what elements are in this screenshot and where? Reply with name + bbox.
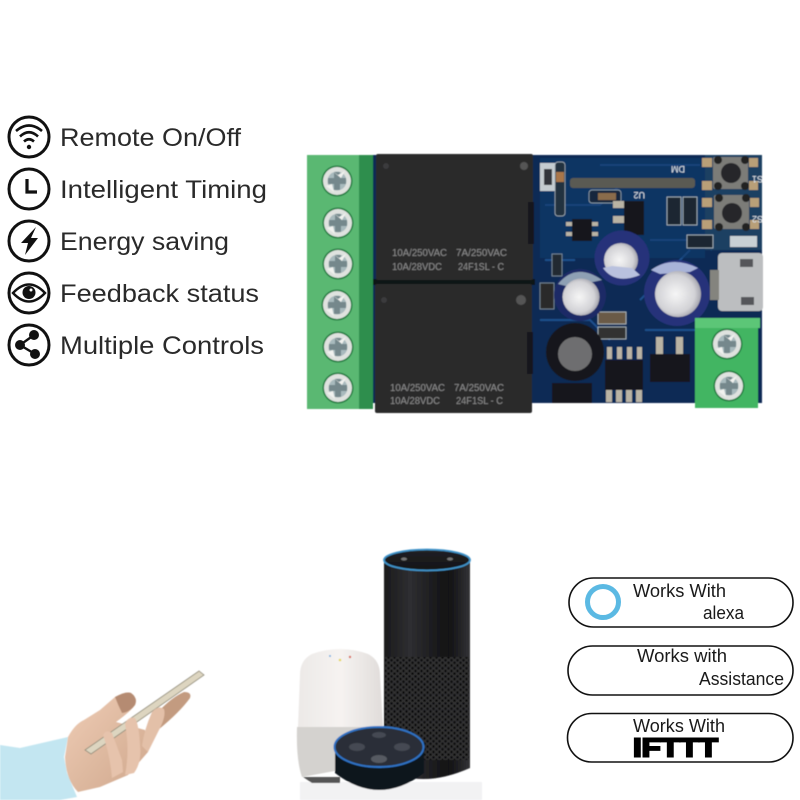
tactile button S2 xyxy=(702,194,759,231)
icon: share nodes xyxy=(9,325,49,365)
silkscreen labels xyxy=(633,164,763,224)
capacitor left xyxy=(554,269,606,321)
USB port xyxy=(710,253,763,311)
palm and thumb xyxy=(65,692,148,792)
left screw terminal xyxy=(307,155,373,409)
right screw terminal xyxy=(695,318,760,408)
circuit board xyxy=(312,155,762,403)
far finger xyxy=(158,692,190,730)
silkscreen labels: DM xyxy=(671,164,685,174)
relay 1 markings xyxy=(392,247,507,273)
label: Multiple Controls: Multiple Controls xyxy=(60,332,264,360)
relay 1 markings: 7A/250VAC xyxy=(456,247,507,259)
relay 2 markings: 10A/250VAC xyxy=(390,382,445,394)
small surface components xyxy=(540,162,757,339)
relay 2 xyxy=(375,284,533,413)
icon: eye xyxy=(9,273,49,313)
speaker mesh xyxy=(385,657,469,760)
feature list xyxy=(9,117,267,365)
solder pads xyxy=(566,201,683,402)
text: Works With: Works With xyxy=(633,580,726,601)
antenna strip xyxy=(570,178,695,188)
middle finger xyxy=(142,708,164,752)
relay 2 markings: 24F1SL - C xyxy=(456,395,503,407)
feature: Remote On/Off xyxy=(9,117,241,157)
label: Feedback status: Feedback status xyxy=(60,280,259,308)
text: alexa: alexa xyxy=(703,602,745,623)
right terminal screws xyxy=(712,328,744,402)
label: Intelligent Timing: Intelligent Timing xyxy=(60,176,267,204)
echo dot xyxy=(334,727,424,790)
text: Works With: Works With xyxy=(633,715,725,736)
feature: Feedback status xyxy=(9,273,259,313)
relay gap xyxy=(373,279,535,285)
echo top with light ring xyxy=(384,550,470,570)
badge: Works with Assistance xyxy=(568,645,793,695)
relay 1 markings: 10A/250VAC xyxy=(392,247,447,259)
thumb nail shading xyxy=(115,692,136,713)
capacitor right xyxy=(644,260,710,326)
label: Energy saving: Energy saving xyxy=(60,228,229,256)
relay 2 markings: 7A/250VAC xyxy=(454,382,504,394)
relay module board xyxy=(307,154,763,413)
hand holding phone xyxy=(0,671,204,800)
tactile button S1 xyxy=(702,156,758,190)
text: Works with: Works with xyxy=(637,645,727,666)
badge: Works With alexa xyxy=(569,578,793,627)
silkscreen labels: S2 xyxy=(752,214,763,224)
icon: alexa ring xyxy=(588,586,618,620)
icon: lightning bolt xyxy=(9,221,49,261)
badge: Works With IFTTT xyxy=(568,714,793,762)
little finger xyxy=(103,731,123,778)
relay 1 markings: 10A/28VDC xyxy=(392,261,442,273)
smart speakers xyxy=(297,550,482,800)
compatibility badges xyxy=(568,578,793,762)
relay 2 markings xyxy=(390,382,504,407)
feature: Energy saving xyxy=(9,221,229,261)
silkscreen labels: U2 xyxy=(633,190,645,200)
capacitor top xyxy=(594,230,650,286)
icon: clock xyxy=(9,169,49,209)
google home speaker xyxy=(297,649,385,783)
integrated circuits xyxy=(552,201,690,403)
feature: Multiple Controls xyxy=(9,325,264,365)
ring finger xyxy=(125,718,140,775)
silkscreen labels: S1 xyxy=(752,174,763,184)
shirt sleeve xyxy=(0,737,77,800)
text: Assistance: Assistance xyxy=(699,668,784,689)
reflection xyxy=(300,782,482,800)
relay 1 markings: 24F1SL - C xyxy=(458,261,504,273)
relay 2 markings: 10A/28VDC xyxy=(390,395,440,407)
text: IFTTT logo: IFTTT xyxy=(633,732,718,762)
phone xyxy=(85,671,204,754)
relay 1 xyxy=(376,154,534,280)
icon: wifi xyxy=(9,117,49,157)
terminal screws xyxy=(322,166,354,404)
label: Remote On/Off: Remote On/Off xyxy=(60,124,241,152)
inductor xyxy=(546,323,604,381)
feature: Intelligent Timing xyxy=(9,169,267,209)
tall echo speaker xyxy=(384,550,470,779)
